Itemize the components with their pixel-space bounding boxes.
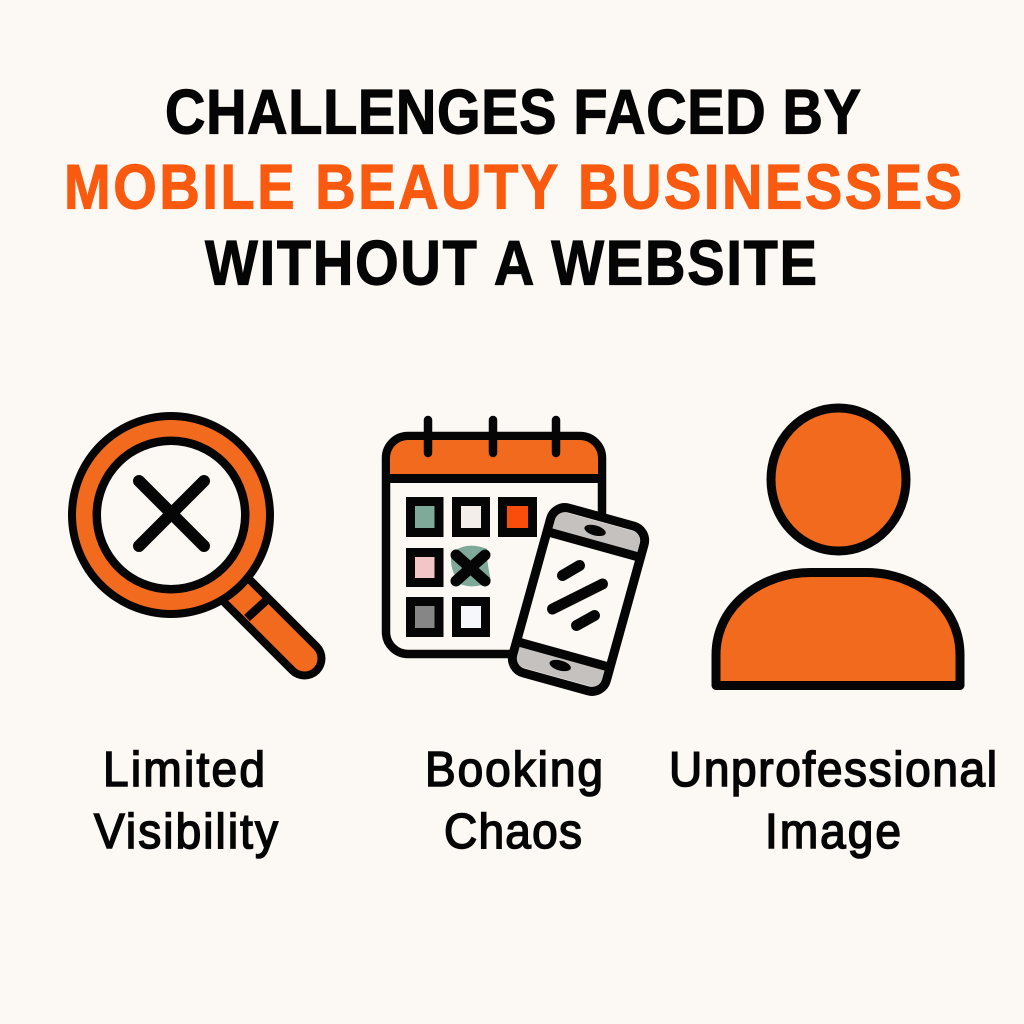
magnifier handle bbox=[228, 582, 304, 658]
person head bbox=[771, 408, 906, 551]
label: Booking Chaos: Booking bbox=[425, 743, 603, 797]
title bbox=[64, 76, 962, 298]
label: Unprofessional Image bbox=[669, 743, 997, 859]
label: Booking Chaos bbox=[425, 743, 603, 859]
X mark in lens bbox=[139, 481, 204, 546]
calendar body bbox=[386, 420, 602, 654]
label: Limited Visibility bbox=[94, 743, 278, 859]
icon: person bbox=[716, 408, 960, 686]
smartphone bbox=[509, 504, 648, 695]
label: Unprofessional Image: Unprofessional bbox=[669, 743, 997, 797]
icon: magnifying glass with X bbox=[68, 412, 304, 658]
title line 3: WITHOUT A WEBSITE bbox=[205, 227, 817, 298]
cancelled date cell bbox=[451, 546, 491, 586]
phone screen lines bbox=[552, 566, 602, 626]
title line 2 (highlight): MOBILE BEAUTY BUSINESSES bbox=[64, 151, 962, 222]
label: Booking Chaos: Chaos bbox=[444, 805, 582, 859]
title line 1: CHALLENGES FACED BY bbox=[165, 76, 861, 147]
label: Limited Visibility: Limited bbox=[103, 743, 265, 797]
calendar date cells bbox=[410, 502, 532, 632]
icon: calendar with phone bbox=[386, 420, 648, 695]
person shoulders bbox=[716, 572, 960, 686]
label: Unprofessional Image: Image bbox=[765, 805, 901, 859]
label: Limited Visibility: Visibility bbox=[94, 805, 278, 859]
magnifier ring bbox=[68, 412, 274, 618]
